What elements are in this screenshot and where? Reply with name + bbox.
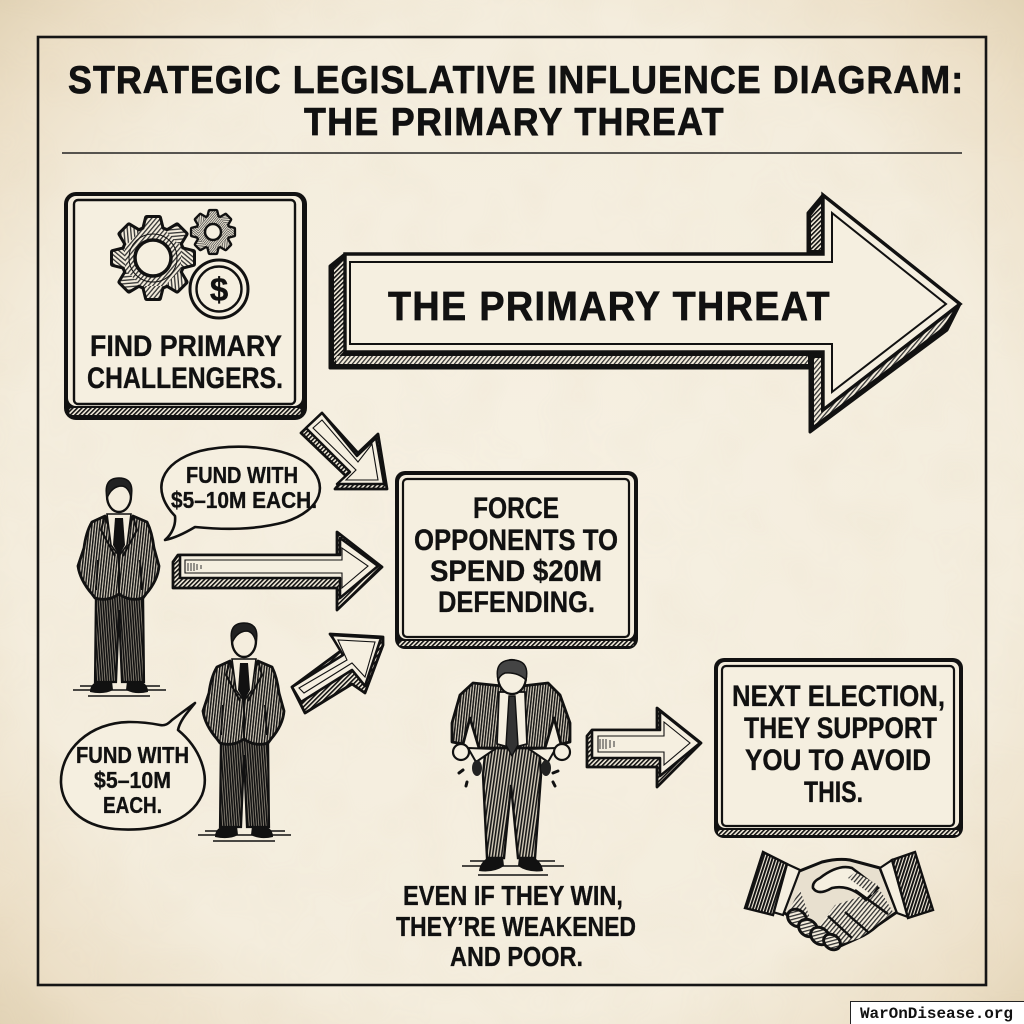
label: CHALLENGERS. <box>87 362 283 395</box>
speech bubble: fund with (top): FUND WITH <box>186 462 298 488</box>
panel: force opponents: DEFENDING. <box>438 586 595 619</box>
panel: force opponents <box>395 471 638 649</box>
panel: next election: YOU TO AVOID <box>745 744 931 777</box>
caption: even if they win: THEY’RE WEAKENED <box>396 911 636 942</box>
speech bubble: fund with (top): $5–10M EACH. <box>171 487 317 513</box>
caption: even if they win <box>396 880 636 972</box>
figure: man with empty pockets <box>452 660 570 875</box>
arrow label: THE PRIMARY THREAT <box>388 284 830 329</box>
panel: force opponents: FORCE <box>473 492 559 525</box>
icon: gears and coin: $ <box>210 271 228 308</box>
speech bubble: fund with (bottom) <box>61 703 205 830</box>
panel: force opponents: SPEND $20M <box>430 555 602 588</box>
panel: next election: THIS. <box>804 776 863 809</box>
icon: gears and coin <box>113 211 248 318</box>
speech bubble: fund with (top) <box>161 447 320 540</box>
caption: even if they win: EVEN IF THEY WIN, <box>403 880 623 911</box>
panel: force opponents: OPPONENTS TO <box>414 524 618 557</box>
watermark: WarOnDisease.org <box>860 1005 1013 1023</box>
panel: find primary challengers <box>64 192 307 420</box>
label <box>87 330 283 395</box>
title: STRATEGIC LEGISLATIVE INFLUENCE DIAGRAM: <box>68 58 963 101</box>
arrow: diagonal up-right <box>292 634 383 713</box>
title: THE PRIMARY THREAT <box>304 100 724 143</box>
label: FIND PRIMARY <box>90 330 282 363</box>
panel: next election <box>714 658 963 838</box>
arrow: to next election <box>587 708 701 787</box>
panel: next election: THEY SUPPORT <box>744 712 937 745</box>
speech bubble: fund with (bottom): FUND WITH <box>76 742 189 768</box>
title <box>68 58 963 143</box>
icon: handshake <box>745 852 933 953</box>
speech bubble: fund with (bottom): EACH. <box>103 792 162 818</box>
figure: second standing man <box>198 623 291 841</box>
arrow: horizontal to center box <box>173 532 382 610</box>
arrow: the primary threat <box>330 195 960 432</box>
speech bubble: fund with (bottom): $5–10M <box>94 767 171 793</box>
caption: even if they win: AND POOR. <box>450 941 583 972</box>
arrow: diagonal down-right <box>301 413 387 489</box>
panel: next election: NEXT ELECTION, <box>732 680 945 713</box>
figure: standing man with hands in pockets <box>73 478 166 696</box>
